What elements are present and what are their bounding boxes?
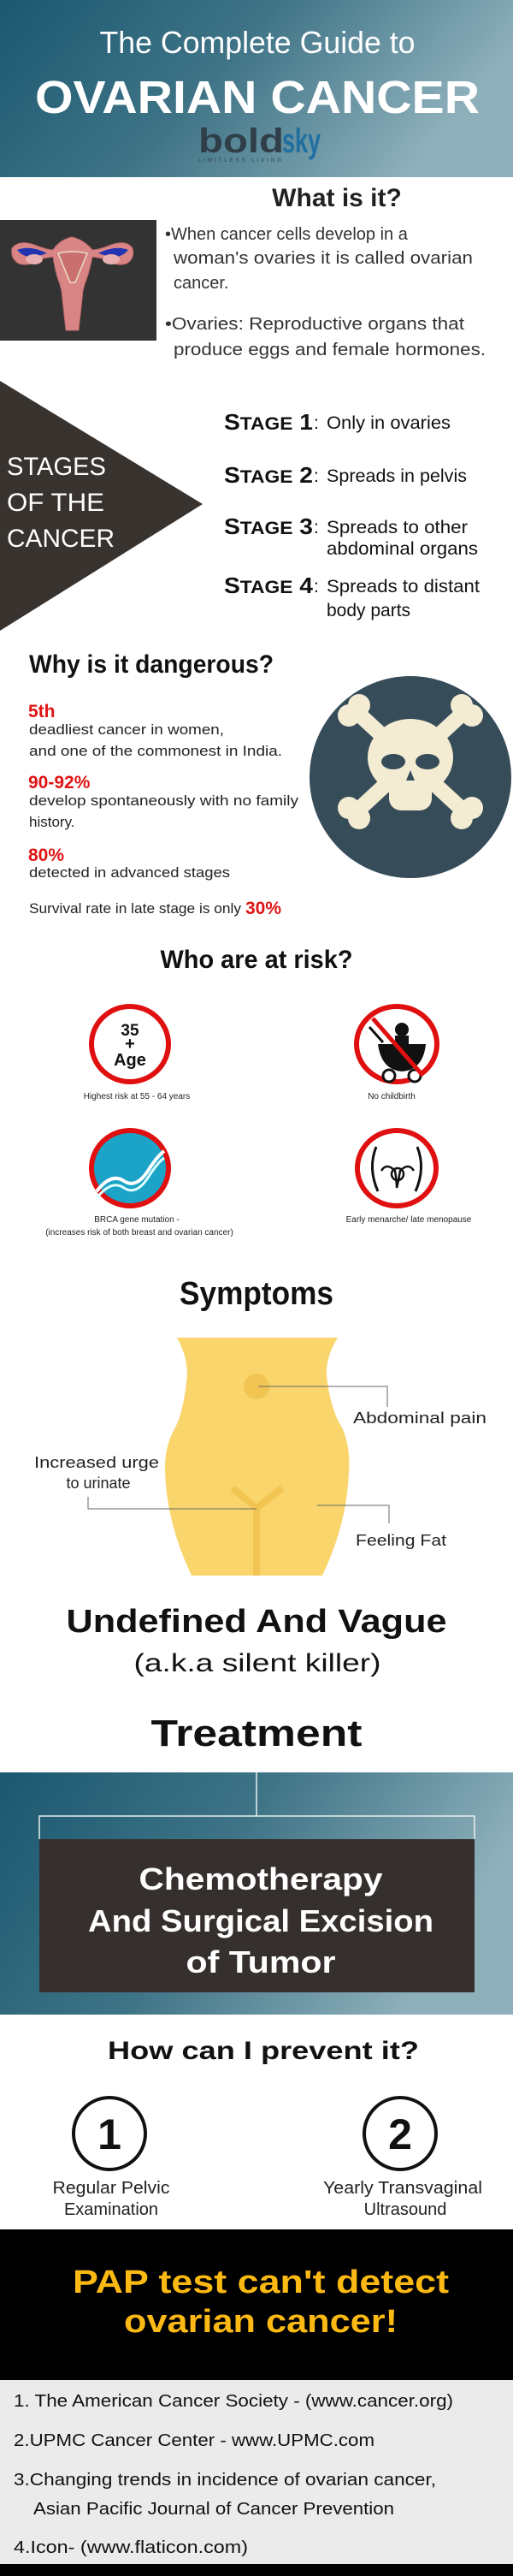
text block: what is it bullets: cancer. [174,274,228,293]
heading: treatment: Treatment [150,1712,363,1754]
text block: what is it bullets: •When cancer cells develop in a [165,225,409,244]
list: stages: Spreads to distant [327,577,480,597]
panel: references: 1. The American Cancer Society - (www.cancer.org) [14,2392,453,2411]
title line 1: The Complete Guide to [99,25,416,60]
text block: danger stats: 5th [28,702,55,721]
text block: danger stats: 80% [28,846,64,865]
list: stages: : [314,466,319,486]
icon: age 35+: Highest risk at 55 - 64 years [84,1092,190,1101]
callout: PAP test: PAP test can't detect [73,2264,449,2300]
list: stages: : [314,518,319,537]
panel: treatment band [0,1772,513,2015]
list: stages: body parts [327,601,410,620]
icon: age 35+ [84,1006,190,1101]
label: urinate line 2: to urinate [66,1475,131,1492]
item: pelvic exam [53,2098,169,2219]
item: pelvic exam: 1 [97,2110,121,2158]
list: stages: STAGE 1 [224,409,313,435]
heading: undefined and vague: Undefined And Vague [67,1604,446,1640]
list: stages: STAGE 2 [224,462,313,488]
item: ultrasound: Yearly Transvaginal [323,2179,482,2198]
panel: stages triangle: STAGES [7,453,106,481]
icon: no childbirth [357,1006,437,1101]
logo boldsky: sky [282,122,321,160]
diagram: body with symptoms [34,1338,486,1576]
callout: PAP test [0,2229,513,2380]
panel: references: 3.Changing trends in incidence of ovarian cancer, [14,2471,436,2490]
heading: why dangerous: Why is it dangerous? [29,650,274,679]
icon: BRCA gene [45,1131,233,1238]
list: stages: : [314,413,319,433]
text block: danger stats: detected in advanced stages [29,864,230,881]
image: uterus illustration [0,220,156,341]
list: stages: Spreads in pelvis [327,466,467,486]
treatment text: of Tumor [186,1944,335,1979]
text block: what is it bullets [165,225,486,359]
header banner [0,0,513,177]
item: ultrasound [323,2098,482,2219]
label: feeling fat: Feeling Fat [356,1532,446,1549]
heading: prevent: How can I prevent it? [108,2037,419,2065]
icon: BRCA gene: (increases risk of both breast and ovarian cancer) [45,1228,233,1238]
list: stages: abdominal organs [327,539,478,559]
text block: danger stats: 90-92% [28,773,91,792]
panel: stages triangle [0,381,203,631]
panel: stages triangle: CANCER [7,525,115,553]
callout: PAP test: ovarian cancer! [124,2304,398,2340]
list: stages [224,409,480,620]
logo boldsky: bold [198,122,284,160]
text block: danger stats [28,702,299,918]
label: urinate: Increased urge [34,1454,159,1471]
icon: skull and crossbones [310,676,511,878]
icon: menarche/menopause [346,1131,472,1225]
list: stages: : [314,577,319,597]
treatment text: And Surgical Excision [88,1903,433,1938]
icon: no childbirth: No childbirth [368,1092,416,1101]
item: ultrasound: 2 [388,2110,412,2158]
icon: age 35+: + [125,1035,135,1054]
treatment text [88,1861,433,1979]
panel: references: 2.UPMC Cancer Center - www.UPMC.com [14,2431,374,2450]
text block: danger stats: deadliest cancer in women, [29,721,224,738]
icon: menarche/menopause: Early menarche/ late menopause [346,1215,472,1225]
item: ultrasound: Ultrasound [364,2200,446,2219]
text block: danger stats: Survival rate in late stage is only [29,900,241,917]
heading: what is it: What is it? [272,184,402,212]
icon: age 35+: Age [114,1051,146,1070]
list: stages: Only in ovaries [327,413,451,433]
item: pelvic exam: Examination [64,2200,158,2219]
heading: who are at risk: Who are at risk? [161,946,352,974]
item: pelvic exam: Regular Pelvic [53,2179,169,2198]
panel: references: 4.Icon- (www.flaticon.com) [14,2538,248,2557]
list: stages: STAGE 4 [224,573,314,598]
panel: references: Asian Pacific Journal of Cancer Prevention [33,2500,394,2519]
icon: BRCA gene: BRCA gene mutation - [94,1215,180,1225]
logo boldsky [198,122,321,163]
text block: danger stats: and one of the commonest in India. [29,743,282,759]
logo boldsky: LIMITLESS LIVING [198,158,284,163]
panel: stages triangle: OF THE [7,489,104,517]
label: abdominal pain: Abdominal pain [353,1410,486,1427]
panel: references [0,2380,513,2576]
text block: what is it bullets: produce eggs and female hormones. [174,341,486,359]
text block: danger stats: history. [29,814,75,830]
icon: age 35+: 35 [121,1022,139,1040]
title line 2: OVARIAN CANCER [35,72,480,123]
text block: danger stats: 30% [245,899,281,918]
treatment text: Chemotherapy [139,1861,383,1896]
text block: what is it bullets: •Ovaries: Reproductive organs that [165,315,464,334]
list: stages: Spreads to other [327,518,468,537]
subheading: silent killer: (a.k.a silent killer) [133,1649,381,1677]
heading: symptoms: Symptoms [180,1276,333,1312]
text block: danger stats: develop spontaneously with no family [29,792,299,809]
text block: what is it bullets: woman's ovaries it is called ovarian [173,249,473,268]
list: stages: STAGE 3 [224,513,313,539]
